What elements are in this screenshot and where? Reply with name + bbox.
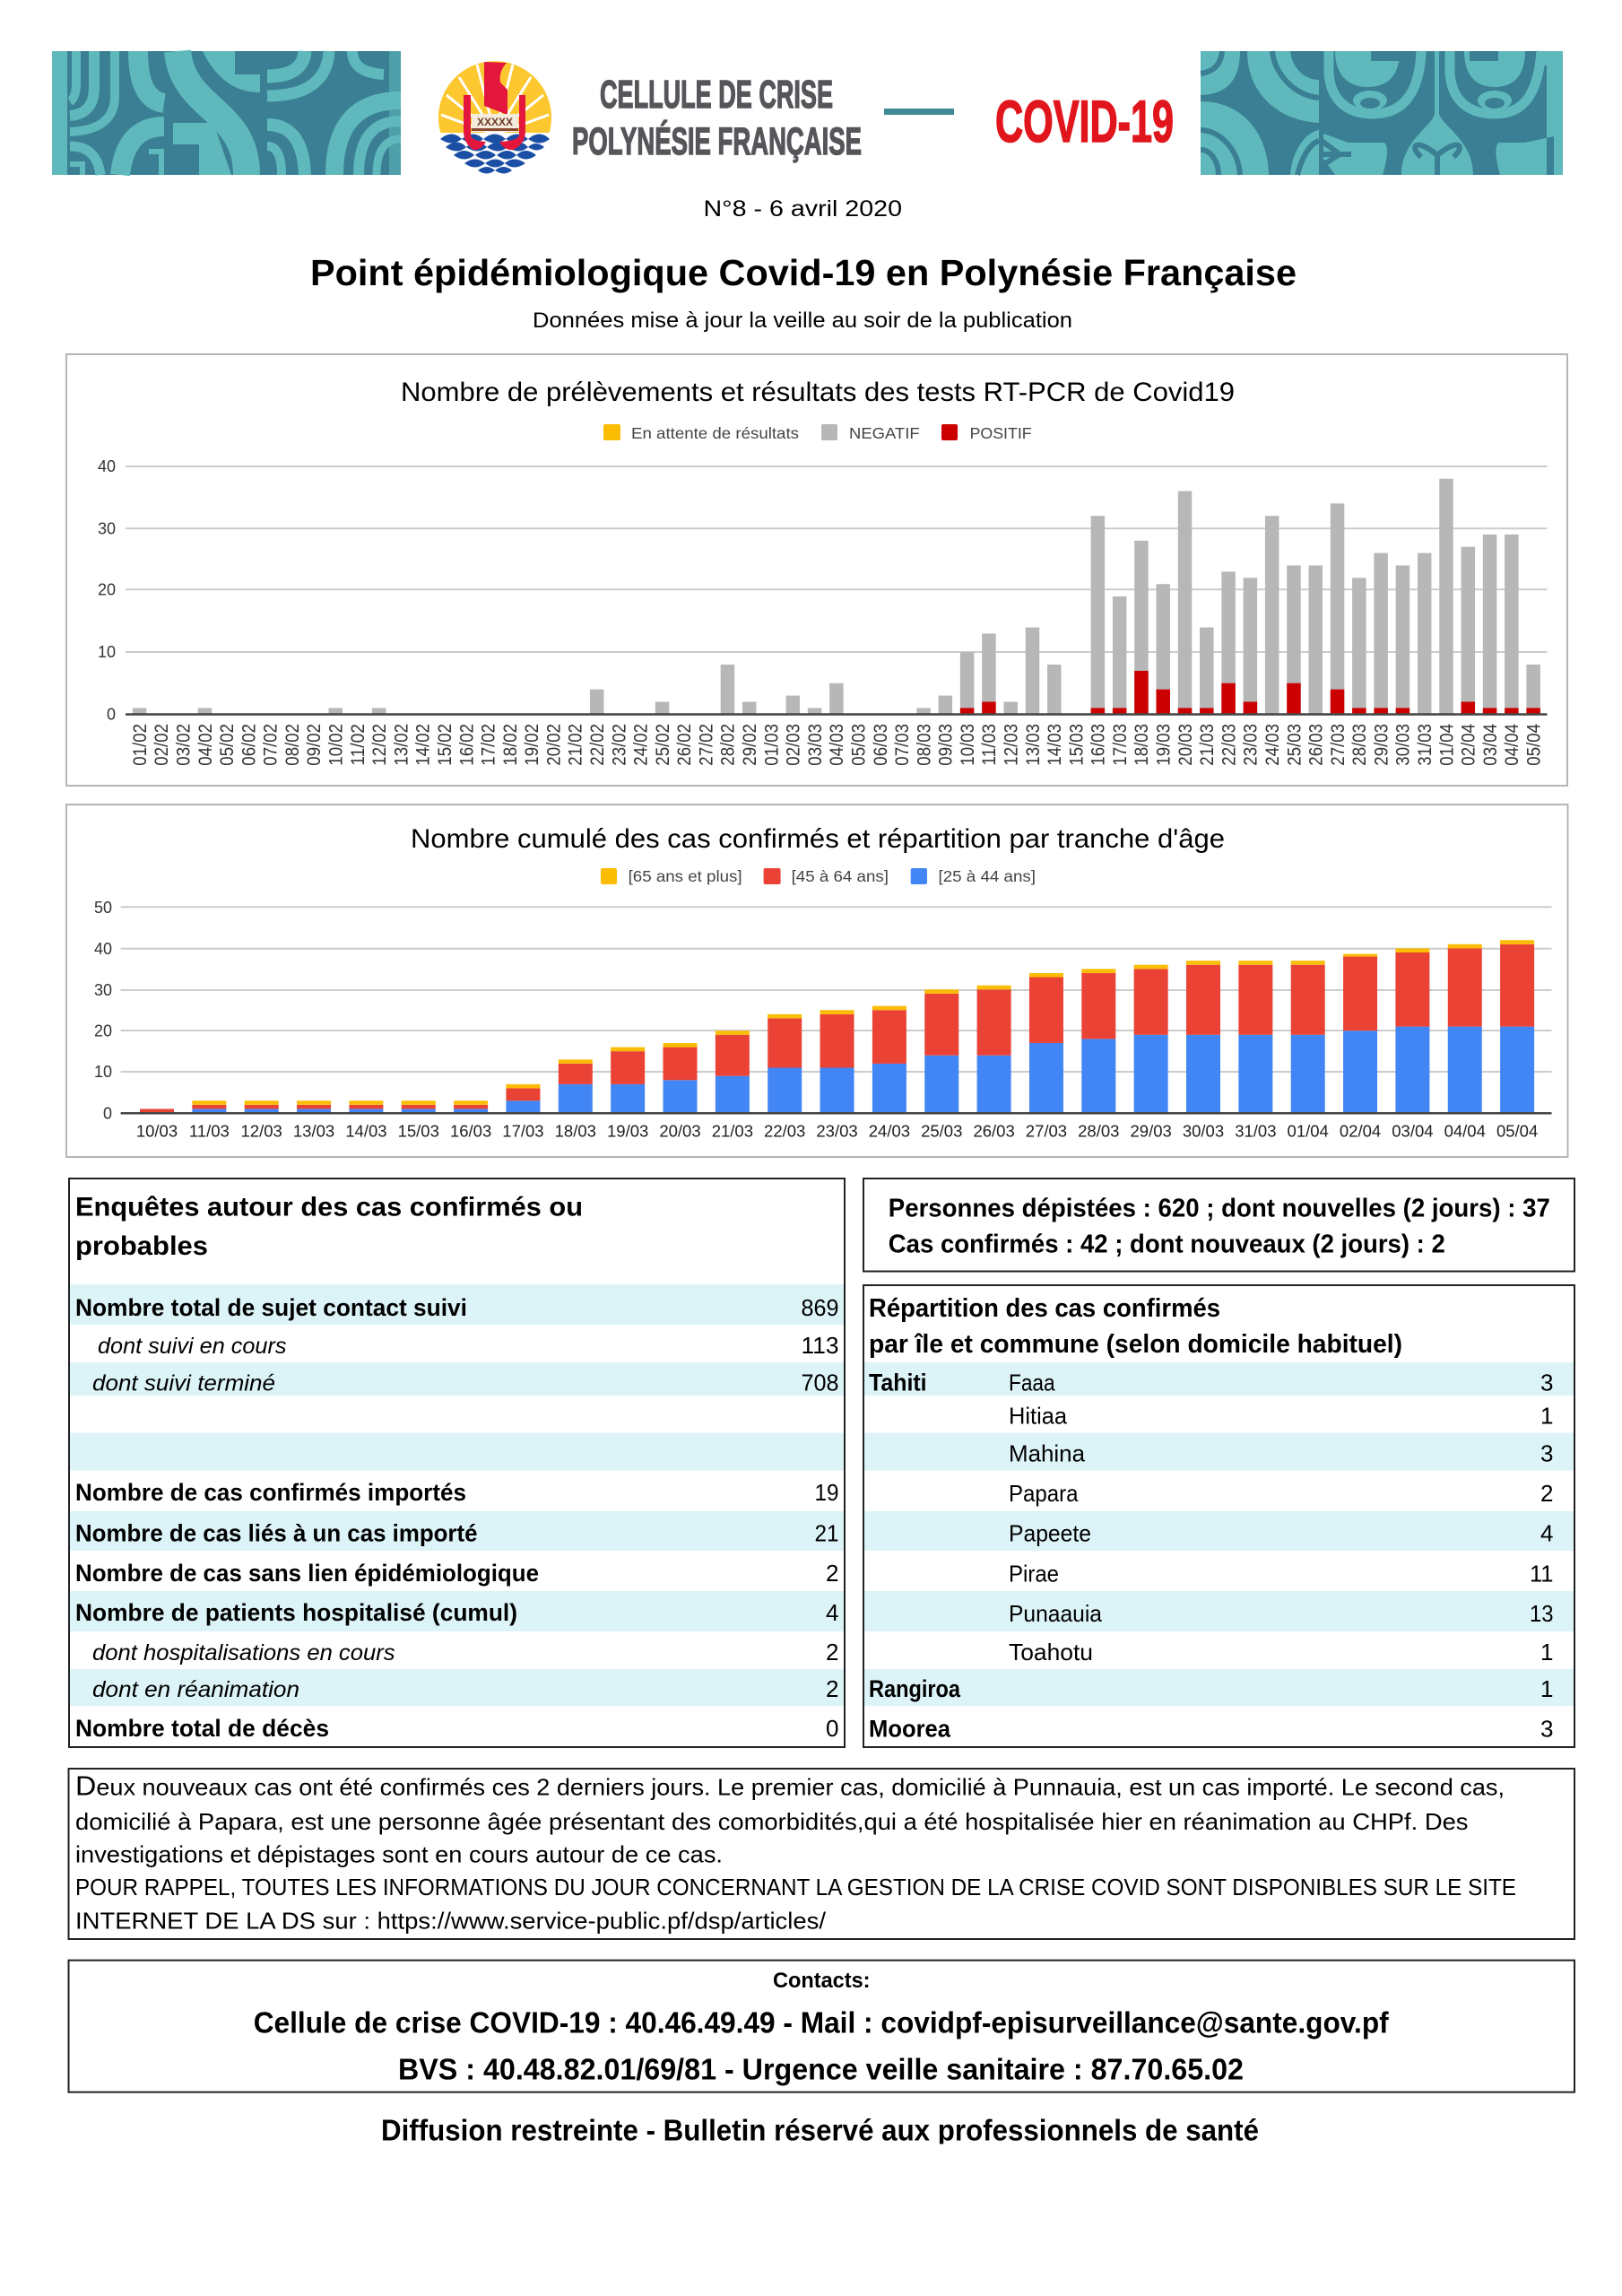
panel: commentary: POUR RAPPEL, TOUTES LES INFORMATIONS DU JOUR CONCERNANT LA GESTION DE LA CRISE COVID SONT DISPONIBLES SUR LE SITE — [75, 1874, 1516, 1900]
row: Tahiti Faaa: Faaa — [1009, 1369, 1055, 1396]
x axis date labels: 14/02 — [413, 724, 434, 766]
row: Papara: Papara — [1009, 1480, 1079, 1507]
x axis date labels: 04/02 — [195, 724, 216, 766]
x axis date labels: 27/03 — [1026, 1121, 1067, 1141]
x axis date labels: 10/03 — [136, 1121, 178, 1141]
panel: cumulative cases by age bar chart — [66, 804, 1567, 1157]
row: Hitiaa: Hitiaa — [1009, 1403, 1068, 1430]
row: Rangiroa: Rangiroa — [869, 1675, 961, 1702]
row: hospitalisés — [75, 1599, 839, 1626]
legend — [601, 867, 1036, 885]
x axis date labels: 30/03 — [1393, 724, 1414, 766]
row: décès: Nombre total de décès — [75, 1715, 329, 1742]
row: Tahiti Faaa: Tahiti — [869, 1369, 927, 1396]
x axis date labels: 01/04 — [1436, 724, 1457, 766]
row: contacts suivis: 869 — [802, 1294, 839, 1321]
x axis date labels: 03/03 — [805, 724, 826, 766]
x axis date labels: 01/02 — [130, 724, 151, 766]
table heading: Répartition des cas confirmés — [869, 1294, 1220, 1323]
row: sans lien — [75, 1560, 839, 1587]
x axis date labels: 21/02 — [566, 724, 586, 766]
x axis date labels: 29/03 — [1131, 1121, 1172, 1141]
row: Pirae — [1009, 1561, 1553, 1587]
y axis labels: 30 — [98, 520, 116, 538]
row: cas importés — [75, 1479, 839, 1506]
x axis date labels: 26/03 — [1306, 724, 1327, 766]
x axis date labels: 11/03 — [979, 724, 1000, 766]
row: contacts suivis: Nombre total de sujet contact suivi — [75, 1294, 467, 1321]
contact line: crisis cell: Cellule de crise COVID-19 : 40.46.49.49 - Mail : covidpf-episurveillance@sante.gov.pf — [254, 2006, 1390, 2039]
row: Papeete: Papeete — [1009, 1519, 1091, 1546]
row: Rangiroa — [869, 1675, 1553, 1702]
x axis date labels: 06/03 — [871, 724, 891, 766]
row: suivi terminé: 708 — [802, 1369, 839, 1396]
y axis labels: 30 — [94, 981, 112, 999]
row: Tahiti Faaa — [869, 1369, 1553, 1396]
x axis date labels: 20/02 — [543, 724, 564, 766]
x axis date labels: 17/03 — [1110, 724, 1131, 766]
x axis date labels: 23/03 — [1241, 724, 1262, 766]
x axis date labels: 28/03 — [1349, 724, 1370, 766]
x axis date labels: 05/03 — [848, 724, 870, 766]
y axis labels: 50 — [94, 899, 112, 917]
x axis date labels: 31/03 — [1415, 724, 1436, 766]
x axis date labels: 13/03 — [293, 1121, 334, 1141]
panel: répartition table — [863, 1285, 1574, 1747]
contact line: BVS: BVS : 40.48.82.01/69/81 - Urgence veille sanitaire : 87.70.65.02 — [398, 2053, 1244, 2086]
stacked bars: 45 à 64 ans — [140, 944, 1534, 1113]
row: Toahotu — [1009, 1639, 1553, 1665]
x axis date labels: 15/03 — [398, 1121, 439, 1141]
row: hospitalisations en cours: 2 — [826, 1639, 839, 1665]
x axis date labels: 25/03 — [921, 1121, 962, 1141]
emblem: Polynésie française: XXXXX — [477, 116, 513, 128]
banner heading: COVID-19: COVID-19 — [995, 88, 1174, 154]
banner dash — [884, 109, 954, 115]
y axis labels: 20 — [98, 581, 116, 599]
row: Moorea: Moorea — [869, 1715, 951, 1742]
row: cas liés: Nombre de cas liés à un cas importé — [75, 1519, 477, 1546]
x axis date labels: 28/02 — [718, 724, 739, 766]
x axis date labels: 14/03 — [1045, 724, 1065, 766]
x axis date labels: 24/03 — [1262, 724, 1283, 766]
x axis date labels: 23/03 — [816, 1121, 858, 1141]
row: cas importés: Nombre de cas confirmés importés — [75, 1479, 466, 1506]
x axis date labels: 28/03 — [1078, 1121, 1119, 1141]
confirmed cases: Cas confirmés : 42 ; dont nouveaux (2 jours) : 2 — [889, 1230, 1445, 1258]
positive bars — [960, 671, 1540, 714]
x axis date labels: 14/03 — [345, 1121, 387, 1141]
x axis date labels: 01/03 — [761, 724, 782, 766]
x axis date labels: 20/03 — [1175, 724, 1196, 766]
row: hospitalisations en cours: dont hospitalisations en cours — [92, 1640, 395, 1665]
row: hospitalisés: Nombre de patients hospitalisé (cumul) — [75, 1599, 517, 1626]
x axis date labels: 11/03 — [189, 1121, 230, 1141]
screened persons: Personnes dépistées : 620 ; dont nouvelles (2 jours) : 37 — [889, 1194, 1550, 1222]
stacked bars: 65 ans et plus — [192, 940, 1534, 1105]
row: réanimation: 2 — [826, 1675, 839, 1702]
x axis date labels: 27/03 — [1328, 724, 1349, 766]
x axis date labels: 10/02 — [326, 724, 346, 766]
x axis date labels: 19/03 — [1153, 724, 1175, 766]
x axis date labels: 22/03 — [764, 1121, 805, 1141]
x axis date labels: 07/03 — [892, 724, 913, 766]
x axis date labels: 15/03 — [1066, 724, 1087, 766]
x axis date labels: 18/02 — [500, 724, 521, 766]
x axis date labels: 22/03 — [1219, 724, 1239, 766]
row: Papara: 2 — [1540, 1480, 1553, 1507]
x axis date labels: 06/02 — [239, 724, 259, 766]
x axis date labels: 16/03 — [1089, 724, 1109, 766]
row: Pirae: 11 — [1530, 1561, 1553, 1587]
row: suivi terminé — [92, 1369, 839, 1396]
row: suivi en cours — [98, 1332, 839, 1359]
x axis date labels: 01/04 — [1288, 1121, 1329, 1141]
panel: commentary: investigations et dépistages sont en cours autour de ce cas. — [75, 1841, 723, 1868]
x axis date labels: 05/04 — [1496, 1121, 1538, 1141]
x axis date labels: 12/03 — [1001, 724, 1022, 766]
banner heading: Polynésie française: POLYNÉSIE FRANÇAISE — [572, 120, 862, 163]
y axis labels — [94, 899, 112, 1123]
legend: En attente de résultats — [631, 424, 799, 442]
panel: key figures — [863, 1178, 1574, 1272]
x axis date labels: 18/03 — [1132, 724, 1152, 766]
row: Tahiti Faaa: 3 — [1540, 1369, 1553, 1396]
y axis labels: 10 — [98, 643, 116, 661]
row: cas liés — [75, 1519, 839, 1546]
x axis date labels — [136, 1121, 1538, 1141]
x axis date labels: 18/03 — [555, 1121, 596, 1141]
x axis date labels: 09/03 — [936, 724, 957, 766]
x axis date labels: 03/04 — [1480, 724, 1501, 766]
table heading: probables — [75, 1231, 208, 1261]
row: Toahotu: Toahotu — [1009, 1639, 1093, 1665]
table heading — [869, 1294, 1402, 1359]
row: hospitalisations en cours — [92, 1639, 839, 1665]
x axis date labels: 29/02 — [740, 724, 760, 766]
legend — [603, 424, 1032, 442]
panel: commentary: domicilié à Papara, est une personne âgée présentant des comorbidités,qui a été hospitalisée hier en réanimation au CHPf. Des — [75, 1808, 1468, 1835]
row: Mahina — [1009, 1440, 1553, 1467]
x axis date labels: 11/02 — [348, 724, 369, 766]
row: Hitiaa — [1009, 1403, 1553, 1430]
x axis date labels: 17/03 — [502, 1121, 544, 1141]
x axis date labels: 05/04 — [1524, 724, 1544, 766]
legend: [25 à 44 ans] — [938, 867, 1036, 885]
x axis date labels: 24/02 — [631, 724, 652, 766]
row: Punaauia: 13 — [1530, 1600, 1553, 1627]
panel: commentary — [68, 1769, 1574, 1939]
right decorative pattern — [1201, 51, 1563, 175]
x axis date labels: 09/02 — [304, 724, 325, 766]
x axis date labels: 05/02 — [217, 724, 238, 766]
x axis date labels: 17/02 — [479, 724, 499, 766]
x axis date labels: 07/02 — [261, 724, 282, 766]
panel: enquêtes table — [69, 1178, 845, 1747]
x axis date labels: 29/03 — [1371, 724, 1392, 766]
table heading: Enquêtes autour des cas confirmés ou — [75, 1193, 583, 1222]
title: Point épidémiologique Covid-19 en Polynésie Française — [310, 252, 1297, 293]
row: Papeete: 4 — [1540, 1519, 1553, 1546]
legend: [65 ans et plus] — [629, 867, 742, 885]
y axis labels: 0 — [107, 705, 116, 723]
x axis date labels: 02/03 — [784, 724, 804, 766]
row: Mahina: Mahina — [1009, 1440, 1086, 1467]
x axis date labels: 02/02 — [152, 724, 172, 766]
x axis date labels: 26/02 — [674, 724, 695, 766]
x axis date labels: 26/03 — [973, 1121, 1015, 1141]
x axis date labels: 04/04 — [1502, 724, 1522, 766]
y axis labels: 40 — [94, 940, 112, 958]
row: cas importés: 19 — [814, 1479, 839, 1506]
x axis date labels: 16/03 — [450, 1121, 491, 1141]
row: sans lien: 2 — [826, 1560, 839, 1587]
x axis date labels: 03/02 — [174, 724, 194, 766]
chart title: Nombre cumulé des cas confirmés et répartition par tranche d'âge — [411, 824, 1225, 854]
row: Punaauia: Punaauia — [1009, 1600, 1102, 1627]
chart title: Nombre de prélèvements et résultats des tests RT-PCR de Covid19 — [401, 378, 1235, 407]
row: suivi en cours: 113 — [802, 1332, 839, 1359]
row: contacts suivis — [75, 1294, 839, 1321]
row: cas liés: 21 — [814, 1519, 839, 1546]
row: décès — [75, 1715, 839, 1742]
x axis date labels: 24/03 — [869, 1121, 910, 1141]
bulletin number and date: N°8 - 6 avril 2020 — [703, 196, 902, 222]
row: suivi en cours: dont suivi en cours — [98, 1334, 287, 1359]
y axis labels: 10 — [94, 1063, 112, 1081]
row: Moorea: 3 — [1540, 1715, 1553, 1742]
footer notice: Diffusion restreinte - Bulletin réservé aux professionnels de santé — [381, 2114, 1259, 2147]
x axis date labels — [130, 724, 1544, 766]
row: sans lien: Nombre de cas sans lien épidémiologique — [75, 1560, 539, 1587]
x axis date labels: 23/02 — [609, 724, 629, 766]
x axis date labels: 19/03 — [607, 1121, 648, 1141]
x axis date labels: 25/02 — [653, 724, 673, 766]
legend: NEGATIF — [849, 424, 920, 442]
x axis date labels: 31/03 — [1235, 1121, 1276, 1141]
x axis date labels: 02/04 — [1459, 724, 1479, 766]
x axis date labels: 04/04 — [1444, 1121, 1486, 1141]
table heading: par île et commune (selon domicile habituel) — [869, 1330, 1402, 1359]
panel: contacts — [68, 1961, 1574, 2092]
row: Papara — [1009, 1480, 1553, 1507]
row: Papeete — [1009, 1519, 1553, 1546]
x axis date labels: 03/04 — [1392, 1121, 1434, 1141]
row: Hitiaa: 1 — [1540, 1403, 1553, 1430]
x axis date labels: 21/03 — [1197, 724, 1218, 766]
y axis labels: 40 — [98, 457, 116, 475]
row: décès: 0 — [826, 1715, 839, 1742]
panel: commentary: INTERNET DE LA DS sur : https://www.service-public.pf/dsp/articles/ — [75, 1908, 827, 1935]
y axis labels: 20 — [94, 1022, 112, 1040]
x axis date labels: 04/03 — [827, 724, 847, 766]
x axis date labels: 13/02 — [391, 724, 412, 766]
table heading — [75, 1193, 583, 1261]
x axis date labels: 15/02 — [435, 724, 455, 766]
row: suivi terminé: dont suivi terminé — [92, 1370, 275, 1396]
header banner — [52, 51, 1563, 176]
x axis date labels: 19/02 — [522, 724, 542, 766]
negative bars — [133, 479, 1540, 714]
banner heading: Cellule de crise: CELLULE DE CRISE — [600, 73, 833, 117]
panel: commentary: Deux nouveaux cas ont été confirmés ces 2 derniers jours. Le premier cas, domicilié à Punnauia, est un cas importé. Le second cas, — [75, 1770, 1505, 1802]
y axis labels: 0 — [103, 1105, 112, 1123]
stacked bars: 25 à 44 ans — [192, 1027, 1534, 1113]
emblem: Polynésie française — [438, 61, 551, 176]
y axis labels — [98, 457, 116, 723]
row: Mahina: 3 — [1540, 1440, 1553, 1467]
row: Toahotu: 1 — [1540, 1639, 1553, 1665]
legend: POSITIF — [970, 424, 1032, 442]
row: réanimation: dont en réanimation — [92, 1677, 299, 1702]
x axis date labels: 22/02 — [587, 724, 608, 766]
x axis date labels: 20/03 — [659, 1121, 701, 1141]
x axis date labels: 21/03 — [712, 1121, 753, 1141]
row: Moorea — [869, 1715, 1553, 1742]
row: hospitalisés: 4 — [826, 1599, 839, 1626]
x axis date labels: 27/02 — [696, 724, 716, 766]
left decorative pattern — [52, 51, 401, 175]
legend: [45 à 64 ans] — [792, 867, 889, 885]
row: Rangiroa: 1 — [1540, 1675, 1553, 1702]
x axis date labels: 30/03 — [1183, 1121, 1224, 1141]
x axis date labels: 10/03 — [958, 724, 978, 766]
row: réanimation — [92, 1675, 839, 1702]
subtitle: Données mise à jour la veille au soir de la publication — [533, 309, 1072, 333]
x axis date labels: 08/02 — [282, 724, 303, 766]
x axis date labels: 25/03 — [1284, 724, 1305, 766]
contacts heading: Contacts: — [773, 1969, 870, 1993]
x axis date labels: 02/04 — [1340, 1121, 1381, 1141]
x axis date labels: 08/03 — [914, 724, 934, 766]
x axis date labels: 13/03 — [1023, 724, 1044, 766]
x axis date labels: 12/02 — [369, 724, 390, 766]
x axis date labels: 12/03 — [241, 1121, 282, 1141]
panel: tests bar chart — [66, 354, 1567, 786]
x axis date labels: 16/02 — [456, 724, 477, 766]
row: Punaauia — [1009, 1600, 1553, 1627]
row: Pirae: Pirae — [1009, 1561, 1059, 1587]
